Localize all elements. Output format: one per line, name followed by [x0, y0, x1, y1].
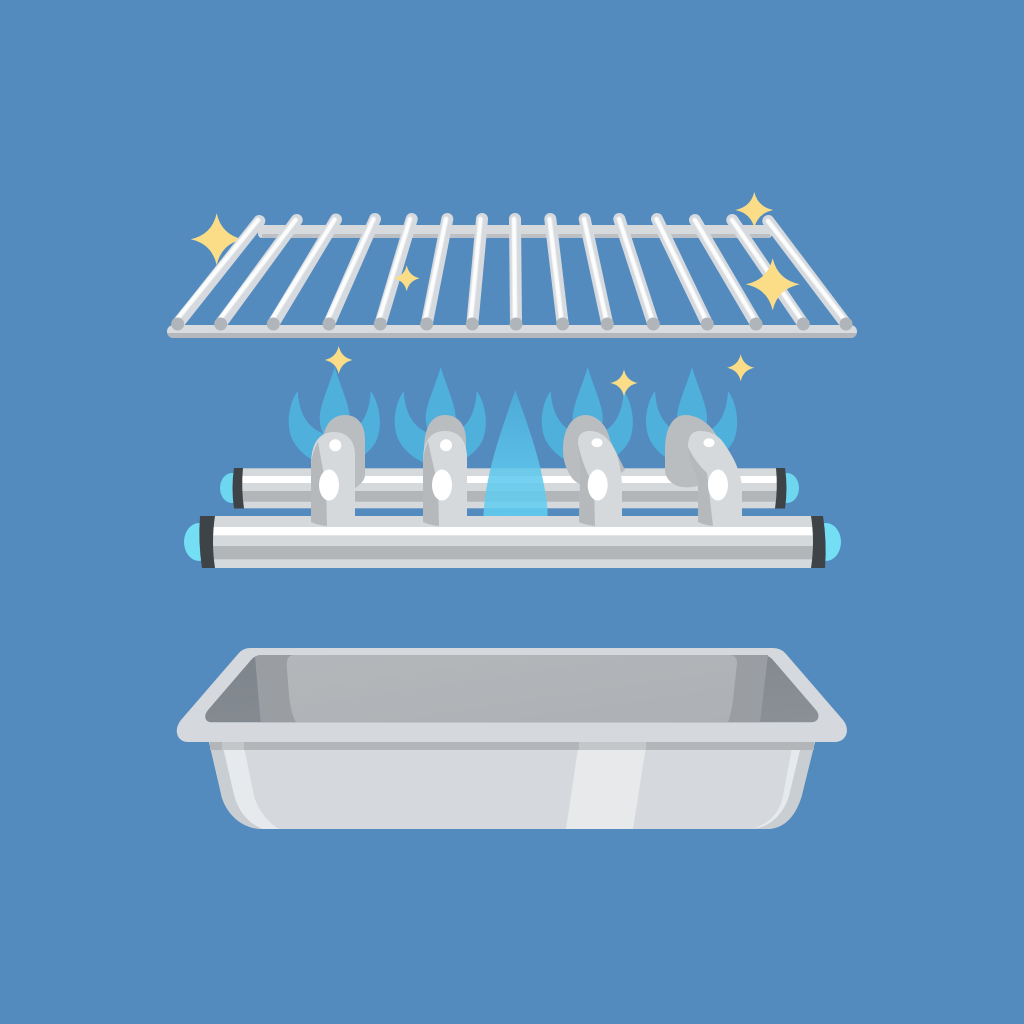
pan: rim [177, 648, 847, 742]
sparkle: large right [746, 258, 800, 310]
pan: left reflection [222, 742, 279, 829]
sparkle: top right [735, 192, 773, 228]
sparkle: near burner 3 [610, 370, 638, 396]
sparkle: above burner 1 [325, 346, 353, 374]
wire rack [167, 219, 857, 338]
pan: right edge shade [753, 742, 815, 829]
rack: bar end caps [171, 318, 852, 330]
valve 4 [665, 415, 742, 526]
sparkle: near burner 4 [727, 354, 754, 381]
pan: shadow band under rim [210, 742, 814, 750]
rack: wire bars [176, 219, 846, 324]
center flame [484, 390, 548, 516]
pan: body [209, 742, 815, 829]
front burner tube [184, 516, 841, 568]
pan: right reflection [753, 742, 802, 829]
flames: burner 2 [395, 367, 486, 464]
back tube: cyan end caps [220, 473, 799, 503]
rack: front rail [167, 325, 857, 338]
flames: burner 3 [542, 367, 633, 464]
flames: burner 1 [289, 367, 380, 464]
front tube: cyan end caps [184, 523, 841, 561]
valve 2 [423, 415, 467, 526]
front tube: dark collars [199, 516, 826, 568]
back burner tube [220, 468, 799, 508]
pan: left edge shade [209, 742, 263, 829]
sparkle: large left behind rack [191, 213, 243, 265]
sparkle: small on rack [394, 265, 420, 291]
flames: burner 4 [646, 367, 737, 464]
valve 3 [563, 415, 625, 526]
drip pan [177, 648, 847, 829]
pan: interior [205, 655, 818, 722]
pan: center reflection [566, 742, 647, 829]
valve 1 [311, 415, 365, 526]
rack: back rail [258, 225, 772, 238]
back tube: dark collars [232, 468, 786, 508]
